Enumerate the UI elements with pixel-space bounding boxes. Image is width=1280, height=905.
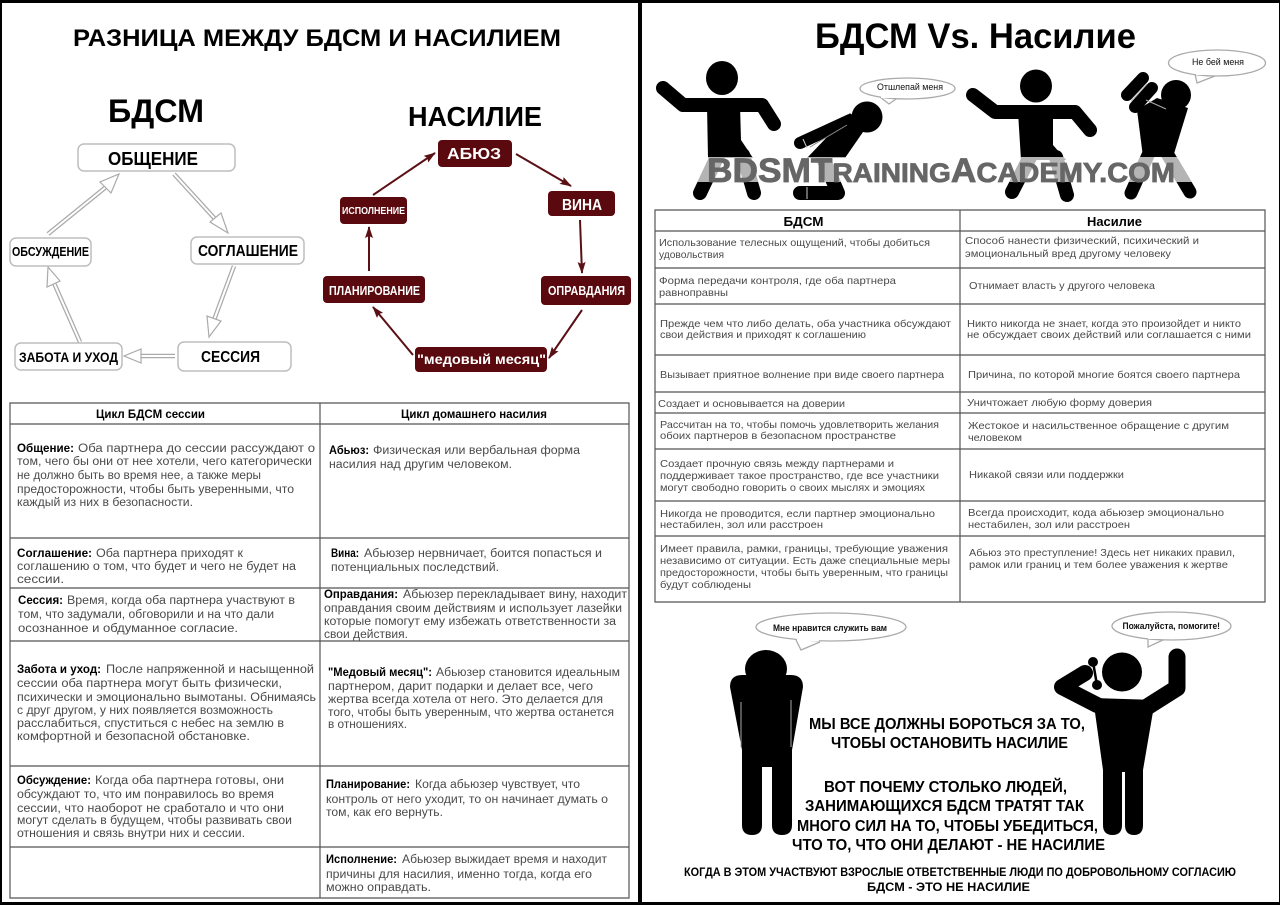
- cell: honeymoon: в отношениях.: [328, 719, 407, 731]
- node: excuses: [541, 276, 631, 305]
- heading: BDSM cycle: БДСМ: [108, 93, 204, 129]
- cell: honeymoon: "Медовый месяц":: [328, 667, 432, 679]
- cell: discussion: могут сделать в будущем, чтобы развивать свои: [17, 815, 292, 827]
- node: session: СЕССИЯ: [201, 349, 260, 366]
- cell: aftercare: Забота и уход:: [17, 664, 101, 676]
- speech bubble: spank me: [860, 78, 955, 104]
- node: guilt: ВИНА: [562, 197, 602, 214]
- cell: agreement: [17, 548, 297, 586]
- node: guilt: [548, 191, 615, 216]
- icon: standing attacker figure: [973, 70, 1090, 195]
- text block: conclusion: [684, 865, 1236, 894]
- cell: excuses: Абьюзер перекладывает вину, находит: [403, 589, 628, 601]
- row 7: Создает прочную связь между партнерами и: [660, 458, 894, 470]
- cell: aftercare: сессии оба партнера могут быть физически,: [17, 678, 282, 690]
- node: execution: [340, 197, 407, 224]
- cell: honeymoon: партнером, дарит подарки и делает все, чего: [328, 681, 593, 693]
- cell: session: Сессия:: [18, 595, 63, 607]
- text block: why people care: [792, 777, 1105, 854]
- cell: communication: [17, 443, 315, 509]
- cell: planning: Планирование:: [326, 779, 410, 791]
- cell: session: [18, 595, 295, 635]
- node: abuse: [438, 140, 512, 167]
- table grid: [10, 403, 629, 898]
- speech bubble: do not hit me: [1168, 50, 1266, 83]
- node: planning: [323, 276, 425, 303]
- row 6: человеком: [968, 432, 1022, 444]
- cell: session: осознанное и обдуманное согласие.: [18, 623, 238, 635]
- node: agreement: [191, 237, 304, 264]
- cell: session: Время, когда оба партнера участвуют в: [67, 595, 295, 607]
- cell: discussion: обсуждают то, что им понравилось во время: [17, 789, 274, 801]
- speech bubble: I like serving you: [756, 613, 906, 650]
- cell: planning: Когда абьюзер чувствует, что: [415, 779, 580, 791]
- node: session: [178, 342, 291, 371]
- text block: why people care: ВОТ ПОЧЕМУ СТОЛЬКО ЛЮДЕЙ,: [824, 777, 1067, 796]
- cell: planning: контроль от него уходит, то он начинает думать о: [326, 794, 608, 806]
- cell: execution: можно оправдать.: [326, 882, 431, 894]
- cell: execution: причины для насилия, именно тогда, когда его: [326, 869, 592, 881]
- cell: agreement: Оба партнера приходят к: [96, 548, 244, 560]
- cell: aftercare: психически и эмоционально вымотаны. Обнимаясь: [17, 692, 316, 704]
- arrow: excuses to honeymoon: [549, 310, 582, 358]
- row 1: Способ нанести физический, психический и: [965, 235, 1199, 247]
- cell: abuse: [329, 445, 581, 471]
- row 9: Абьюз это преступление! Здесь нет никаких правил,: [969, 547, 1235, 559]
- node: aftercare: ЗАБОТА И УХОД: [19, 349, 118, 365]
- cell: execution: [326, 854, 608, 894]
- node: excuses: ОПРАВДАНИЯ: [548, 283, 625, 298]
- node: aftercare: [15, 343, 122, 370]
- cell: planning: [326, 779, 608, 819]
- cell: honeymoon: [328, 667, 620, 731]
- heading: violence cycle: НАСИЛИЕ: [408, 101, 542, 132]
- row 2: равноправны: [659, 287, 728, 299]
- node: execution: ИСПОЛНЕНИЕ: [342, 206, 405, 217]
- cell: guilt: [331, 548, 602, 574]
- row 7: Никакой связи или поддержки: [969, 469, 1124, 481]
- row 6: Жестокое и насильственное обращение с другим: [968, 420, 1229, 432]
- row 7: [660, 458, 1124, 494]
- panel: left page: [2, 3, 638, 902]
- arrow: abuse to guilt: [516, 154, 571, 186]
- speech bubble: I like serving you: Мне нравится служить вам: [773, 623, 887, 633]
- column header: BDSM: БДСМ: [784, 214, 824, 229]
- speech bubble: spank me: Отшлепай меня: [877, 82, 943, 92]
- cell: execution: Абьюзер выжидает время и находит: [402, 854, 608, 866]
- arrow: honeymoon to planning: [373, 307, 413, 355]
- row 9: будут соблюдены: [660, 579, 751, 591]
- icon: kneeling figure: [800, 102, 882, 199]
- row 1: Использование телесных ощущений, чтобы добиться: [659, 237, 930, 249]
- text block: why people care: ЧТО ТО, ЧТО ОНИ ДЕЛАЮТ - НЕ НАСИЛИЕ: [792, 837, 1105, 854]
- cell: honeymoon: того, чтобы быть уверенным, что жертва останется: [328, 707, 614, 719]
- cell: discussion: Обсуждение:: [17, 775, 91, 787]
- cell: execution: Исполнение:: [326, 854, 397, 866]
- arrow: guilt to excuses: [580, 220, 582, 273]
- row 4: [660, 369, 1240, 381]
- arrow: planning to execution: [368, 227, 370, 271]
- cell: aftercare: комфортной и безопасной обстановке.: [17, 731, 250, 743]
- row 3: Никто никогда не знает, когда это произойдет и никто: [967, 318, 1241, 330]
- text block: why people care: МНОГО СИЛ НА ТО, ЧТОБЫ УБЕДИТЬСЯ,: [797, 818, 1098, 835]
- node: agreement: СОГЛАШЕНИЕ: [198, 243, 298, 260]
- row 2: Отнимает власть у другого человека: [969, 280, 1155, 292]
- row 1: удовольствия: [659, 249, 724, 261]
- arrow: aftercare to discussion: [47, 267, 80, 342]
- cell: planning: том, как его вернуть.: [326, 807, 443, 819]
- node: planning: ПЛАНИРОВАНИЕ: [329, 283, 420, 298]
- column header: violence: Насилие: [1087, 214, 1142, 229]
- icon: defending figure: [1127, 78, 1191, 193]
- cell: aftercare: расслабиться, спуститься с небес на землю в: [17, 718, 284, 730]
- row 3: свои действия и приходят к соглашению: [660, 329, 866, 341]
- cell: discussion: отношения и связь внутри них и сессии.: [17, 828, 245, 840]
- cell: discussion: [17, 775, 292, 840]
- text block: conclusion: БДСМ - ЭТО НЕ НАСИЛИЕ: [867, 880, 1030, 894]
- icon: standing dominant figure: [663, 61, 774, 193]
- cell: aftercare: [17, 664, 316, 743]
- row 1: [659, 235, 1199, 261]
- arrow: discussion to communication: [48, 174, 119, 234]
- row 8: [660, 507, 1224, 531]
- cell: excuses: оправдания своим действиям и использует лазейки: [324, 603, 622, 615]
- cell: excuses: которые помогут ему избежать ответственности за: [324, 616, 617, 628]
- text block: stop violence: [809, 716, 1085, 752]
- row 8: нестабилен, зол или расстроен: [968, 519, 1130, 531]
- icon: victim figure: [1062, 652, 1177, 835]
- speech bubble: please help: Пожалуйста, помогите!: [1122, 621, 1220, 631]
- cell: agreement: сессии.: [17, 574, 64, 586]
- cell: agreement: соглашению о том, что будет и чего не будет на: [17, 561, 297, 573]
- cell: abuse: Физическая или вербальная форма: [373, 445, 581, 457]
- row 9: Имеет правила, рамки, границы, требующие уважения: [660, 543, 948, 555]
- cell: communication: каждый из них в безопасности.: [17, 497, 193, 509]
- row 5: Создает и основывается на доверии: [658, 398, 845, 410]
- row 3: не обсуждает своих действий или соглашается с ними: [967, 329, 1251, 341]
- row 5: Уничтожает любую форму доверия: [967, 397, 1152, 409]
- row 4: Причина, по которой многие боятся своего партнера: [968, 369, 1240, 381]
- node: discussion: [10, 238, 91, 266]
- cell: aftercare: После напряженной и насыщенной: [106, 664, 314, 676]
- speech bubble: please help: [1112, 612, 1231, 647]
- node: honeymoon: "медовый месяц": [417, 351, 546, 367]
- illustration: figures top: [663, 50, 1266, 199]
- cell: aftercare: с друг другом, у них появляется возможность: [17, 705, 273, 717]
- node: discussion: ОБСУЖДЕНИЕ: [12, 244, 89, 259]
- row 2: Форма передачи контроля, где оба партнера: [659, 275, 896, 287]
- row 9: предосторожности, чтобы быть уверенным, что границы: [660, 567, 948, 579]
- row 9: рамок или границ и тем более уважения к жертве: [969, 559, 1228, 571]
- cell: discussion: Когда оба партнера готовы, они: [95, 775, 284, 787]
- row 9: независимо от ситуации. Есть даже специальные меры: [660, 555, 950, 567]
- arrow: communication to agreement: [174, 174, 228, 233]
- cell: session: том, что задумали, обговорили и на что дали: [18, 609, 274, 621]
- panel: right page: [642, 3, 1279, 902]
- cell: excuses: Оправдания:: [324, 589, 398, 601]
- text block: stop violence: МЫ ВСЕ ДОЛЖНЫ БОРОТЬСЯ ЗА ТО,: [809, 716, 1085, 733]
- cell: abuse: Абьюз:: [329, 445, 369, 457]
- row 4: Вызывает приятное волнение при виде своего партнера: [660, 369, 944, 381]
- diagram: violence cycle: [323, 140, 631, 372]
- title: left page: РАЗНИЦА МЕЖДУ БДСМ И НАСИЛИЕМ: [73, 25, 561, 52]
- icon: bowing figure: [730, 650, 803, 835]
- table grid: [655, 210, 1265, 602]
- row 2: [659, 275, 1155, 299]
- row 3: Прежде чем что либо делать, оба участника обсуждают: [660, 318, 951, 330]
- watermark: BDSMTRAININGACADEMY.COM: [707, 152, 1175, 190]
- row 1: эмоциональный вред другому человеку: [965, 248, 1172, 260]
- cell: guilt: Вина:: [331, 548, 359, 560]
- table: comparison: [655, 210, 1265, 602]
- cell: communication: предосторожности, чтобы быть уверенными, что: [17, 484, 294, 496]
- row 5: [658, 397, 1152, 410]
- cell: communication: том, чего бы они от нее хотели, чего категорически: [17, 456, 312, 468]
- row 8: Никогда не проводится, если партнер эмоционально: [660, 508, 935, 520]
- row 3: [660, 318, 1251, 341]
- text block: stop violence: ЧТОБЫ ОСТАНОВИТЬ НАСИЛИЕ: [831, 735, 1068, 752]
- arrow: execution to abuse: [373, 153, 435, 195]
- node: abuse: АБЮЗ: [447, 146, 501, 163]
- row 7: поддерживает такое пространство, где все участники: [660, 470, 939, 482]
- diagram: BDSM cycle: [10, 144, 304, 371]
- cell: agreement: Соглашение:: [17, 548, 92, 560]
- cell: guilt: Абьюзер нервничает, боится попасться и: [364, 548, 602, 560]
- cell: excuses: свои действия.: [324, 629, 408, 641]
- node: communication: ОБЩЕНИЕ: [108, 149, 198, 169]
- watermark halo: [695, 157, 1195, 182]
- column header: violence cycle: Цикл домашнего насилия: [401, 409, 547, 421]
- table: cycles: [10, 403, 629, 898]
- arrow: session to aftercare: [124, 349, 175, 363]
- row 9: [660, 543, 1235, 591]
- cell: honeymoon: жертва всегда хотела от него. Это делается для: [328, 694, 603, 706]
- cell: communication: Оба партнера до сессии рассуждают о: [78, 443, 315, 455]
- row 7: могут свободно говорить о своих мыслях и эмоциях: [660, 482, 926, 494]
- arrow: agreement to session: [207, 266, 234, 337]
- text block: conclusion: КОГДА В ЭТОМ УЧАСТВУЮТ ВЗРОСЛЫЕ ОТВЕТСТВЕННЫЕ ЛЮДИ ПО ДОБРОВОЛЬНОМУ СОГЛАСИЮ: [684, 865, 1236, 879]
- title: right page: БДСМ Vs. Насилие: [815, 17, 1136, 56]
- row 6: Рассчитан на то, чтобы помочь удовлетворить желания: [660, 419, 939, 431]
- row 8: Всегда происходит, кода абьюзер эмоционально: [968, 507, 1224, 519]
- speech bubble: do not hit me: Не бей меня: [1192, 57, 1244, 67]
- row 6: обоих партнеров в безопасном пространстве: [660, 430, 896, 442]
- row 8: нестабилен, зол или расстроен: [660, 519, 823, 531]
- text block: why people care: ЗАНИМАЮЩИХСЯ БДСМ ТРАТЯТ ТАК: [805, 798, 1084, 815]
- cell: honeymoon: Абьюзер становится идеальным: [436, 667, 620, 679]
- row 6: [660, 419, 1229, 444]
- cell: excuses: [324, 589, 628, 641]
- cell: communication: Общение:: [17, 443, 74, 455]
- node: honeymoon: [415, 347, 547, 372]
- column header: BDSM cycle: Цикл БДСМ сессии: [96, 409, 205, 421]
- cell: communication: не должно быть во время нее, а также меры: [17, 470, 261, 482]
- cell: guilt: потенциальных последствий.: [331, 562, 499, 574]
- cell: discussion: сессии, что наоборот не сработало и что они: [17, 803, 284, 815]
- cell: abuse: насилия над другим человеком.: [329, 459, 512, 471]
- node: communication: [78, 144, 235, 171]
